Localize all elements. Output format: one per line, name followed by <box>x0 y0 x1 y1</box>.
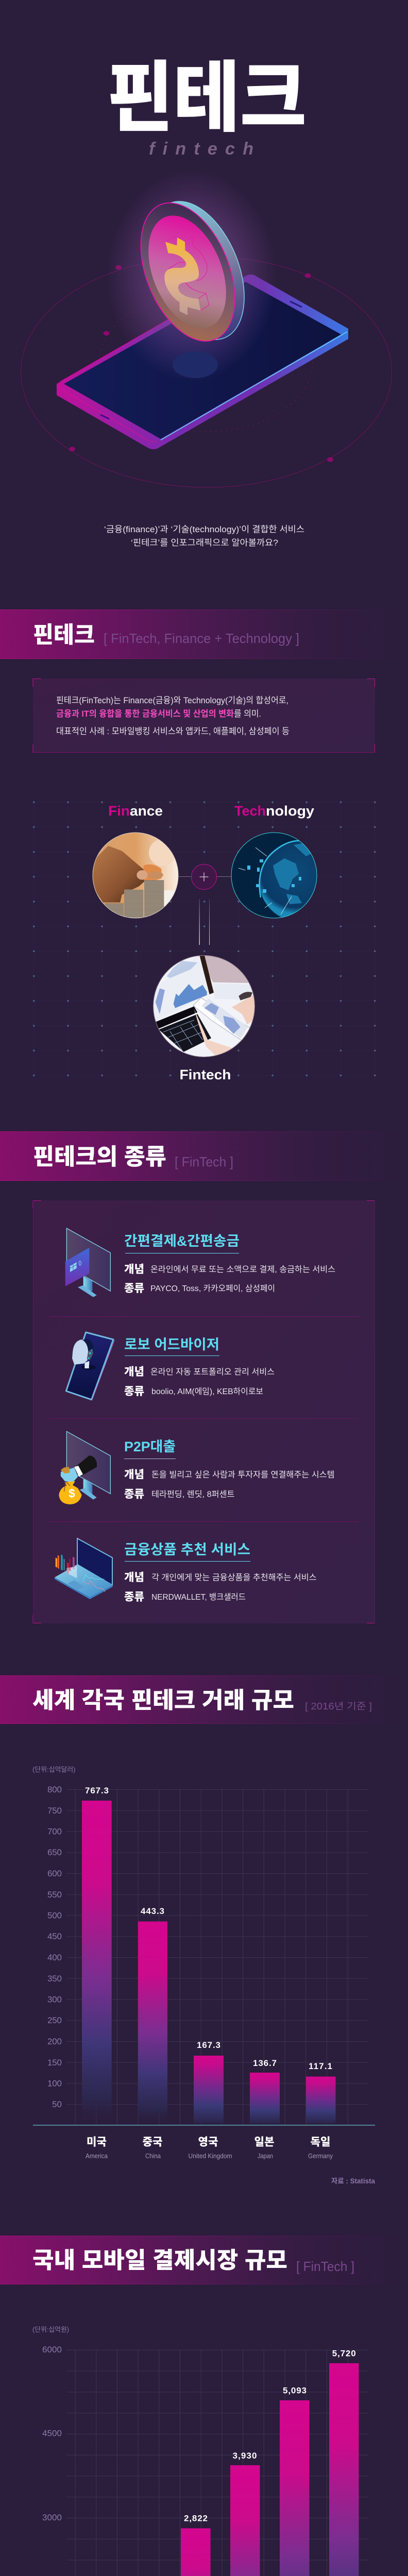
type 4: financial product recommendation: NERDWALLET, 뱅크샐러드 <box>151 1592 246 1602</box>
type 2: robo advisor: 종류 <box>124 1386 144 1397</box>
type 2: robo advisor: 개념 <box>124 1366 144 1378</box>
y axis labels <box>42 2345 62 2576</box>
type 3: P2P lending: 돈을 빌리고 싶은 사람과 투자자를 연결해주는 시스템 <box>151 1470 335 1480</box>
section header: fintech: 핀테크 <box>33 622 95 648</box>
label: Technology <box>234 803 314 819</box>
y axis labels: 800 <box>47 1785 62 1794</box>
category labels: 중국 <box>142 2136 163 2148</box>
type 3: P2P lending: 테라펀딩, 렌딧, 8퍼센트 <box>151 1490 235 1499</box>
intro text: ‘금융(finance)’과 ‘기술(technology)’이 결합한 서비스 <box>104 524 304 534</box>
orbit ring <box>21 257 392 487</box>
type 1: simple payment: 종류 <box>124 1283 144 1294</box>
y axis labels: 600 <box>47 1869 62 1878</box>
section header: fintech: [ FinTech, Finance + Technology ] <box>104 631 299 646</box>
section header: domestic mobile payment <box>0 2236 408 2284</box>
type 3: P2P lending <box>59 1431 335 1504</box>
type 4: financial product recommendation <box>55 1538 317 1603</box>
connector lines <box>178 876 231 877</box>
icon: monitor with card <box>65 1228 110 1297</box>
y axis labels: 250 <box>47 2015 62 2025</box>
bar chart: global fintech transaction volume <box>32 1766 375 2185</box>
category labels: Japan <box>258 2152 273 2160</box>
y axis labels: 50 <box>52 2099 62 2109</box>
plus icon <box>192 865 216 889</box>
category labels: America <box>86 2152 108 2160</box>
unit label: (단위:십억달러) <box>32 1766 75 1773</box>
panel: definition: 를 의미. <box>234 709 261 719</box>
category labels <box>86 2136 333 2160</box>
y axis labels: 350 <box>47 1974 62 1984</box>
y axis labels: 500 <box>47 1910 62 1921</box>
hero illustration: coin above phone <box>21 170 392 487</box>
value labels: 443.3 <box>141 1906 164 1916</box>
y axis labels: 6000 <box>42 2345 62 2354</box>
value labels: 767.3 <box>85 1786 109 1795</box>
section header: global transaction volume: 세계 각국 핀테크 거래 규모 <box>32 1688 294 1713</box>
type 1: simple payment <box>65 1228 335 1297</box>
coin <box>123 188 263 355</box>
type 3: P2P lending: 개념 <box>124 1469 144 1481</box>
category labels: China <box>145 2152 161 2160</box>
icon: robot on phone <box>66 1332 114 1400</box>
y axis labels: 100 <box>47 2078 62 2089</box>
section header: fintech types: [ FinTech ] <box>175 1154 233 1170</box>
type 1: simple payment: 간편결제&간편송금 <box>124 1233 240 1249</box>
subtitle: fintech <box>149 139 253 159</box>
type 1: simple payment: 온라인에서 무료 또는 소액으로 결제, 송금하는 서비스 <box>150 1265 335 1274</box>
value labels: 3,930 <box>233 2451 257 2461</box>
y axis labels: 150 <box>47 2058 62 2067</box>
photo: coins and hand <box>93 833 179 918</box>
y axis labels: 300 <box>47 1995 62 2004</box>
source: 자료 : Statista <box>331 2177 375 2185</box>
photo: digital globe <box>231 833 317 918</box>
label: Technology: Tech <box>234 803 266 819</box>
y axis labels: 650 <box>47 1848 62 1857</box>
value labels: 5,720 <box>332 2349 356 2359</box>
bars <box>82 2363 359 2576</box>
type 4: financial product recommendation: 개념 <box>124 1571 144 1584</box>
equals lines <box>199 899 210 945</box>
type 2: robo advisor: boolio, AIM(에임), KEB하이로보 <box>151 1387 263 1396</box>
value labels <box>86 2349 356 2576</box>
y axis labels: 400 <box>47 1953 62 1962</box>
type 4: financial product recommendation: 종류 <box>124 1591 144 1603</box>
bar chart: domestic mobile payment market <box>32 2326 375 2576</box>
section header: global transaction volume <box>0 1675 408 1724</box>
y axis labels: 200 <box>47 2037 62 2046</box>
type 2: robo advisor <box>66 1332 275 1400</box>
panel: definition: 핀테크(FinTech)는 Finance(금융)와 Technology(기술)의 합성어로, <box>56 696 288 705</box>
type 2: robo advisor: 로보 어드바이저 <box>124 1337 219 1352</box>
dotted grid background <box>31 799 378 1079</box>
intro text: ‘핀테크’를 인포그래픽으로 알아볼까요? <box>131 538 278 548</box>
section header: fintech types: 핀테크의 종류 <box>33 1144 166 1170</box>
y axis labels: 4500 <box>42 2429 62 2438</box>
section header: domestic mobile payment: 국내 모바일 결제시장 규모 <box>32 2248 287 2273</box>
section header: domestic mobile payment: [ FinTech ] <box>296 2259 354 2274</box>
diagram: finance + technology = fintech <box>93 806 317 1080</box>
label: Finance <box>108 803 163 819</box>
panel: definition: 대표적인 사례 : 모바일뱅킹 서비스와 앱카드, 애플페이, 삼성페이 등 <box>56 726 290 736</box>
value labels: 136.7 <box>253 2058 277 2068</box>
type 1: simple payment: 개념 <box>124 1263 144 1276</box>
panel: fintech types <box>33 1200 375 1623</box>
value labels: 5,093 <box>283 2386 307 2396</box>
panel: definition <box>33 679 375 753</box>
y axis labels: 3000 <box>42 2513 62 2522</box>
category labels: 미국 <box>87 2136 107 2148</box>
section header: fintech types <box>0 1131 408 1181</box>
y axis labels: 550 <box>47 1890 62 1900</box>
y axis labels <box>47 1785 62 2109</box>
type 4: financial product recommendation: 각 개인에게 맞는 금융상품을 추천해주는 서비스 <box>151 1573 317 1582</box>
unit label: (단위:십억원) <box>32 2326 69 2333</box>
section header: global transaction volume: [ 2016년 기준 ] <box>305 1701 372 1711</box>
category labels: 독일 <box>310 2136 331 2148</box>
y axis labels: 750 <box>47 1806 62 1816</box>
icon: hand with money bag: $ <box>69 1487 75 1500</box>
panel: definition: 금융과 IT의 융합을 통한 금융서비스 및 산업의 변화 <box>56 709 234 719</box>
category labels: 일본 <box>254 2136 274 2148</box>
category labels: Germany <box>308 2152 333 2160</box>
bars <box>82 1801 336 2125</box>
category labels: United Kingdom <box>189 2152 232 2160</box>
type 1: simple payment: PAYCO, Toss, 카카오페이, 삼성페이 <box>150 1284 275 1293</box>
value labels: 2,822 <box>184 2514 208 2523</box>
value labels <box>85 1786 332 2071</box>
title: 핀테크 <box>107 55 307 141</box>
value labels: 167.3 <box>197 2040 220 2050</box>
section header: fintech <box>0 609 408 659</box>
label: Finance: Fin <box>108 803 130 819</box>
coin shadow <box>173 351 218 378</box>
y axis labels: 450 <box>47 1931 62 1941</box>
type 4: financial product recommendation: 금융상품 추천 서비스 <box>124 1542 250 1557</box>
phone <box>57 275 348 449</box>
value labels: 117.1 <box>309 2061 332 2071</box>
photo: laptop and smartphone <box>152 954 258 1058</box>
type 3: P2P lending: P2P대출 <box>124 1439 176 1454</box>
intro text <box>104 524 304 548</box>
label: Finance: ance <box>130 803 163 819</box>
icon: laptop with charts <box>55 1538 113 1599</box>
y axis labels: 700 <box>47 1827 62 1836</box>
category labels: 영국 <box>198 2136 218 2148</box>
type 2: robo advisor: 온라인 자동 포트폴리오 관리 서비스 <box>150 1367 275 1377</box>
glow behind coin <box>107 170 277 381</box>
icon: hand with money bag <box>59 1431 110 1504</box>
type 3: P2P lending: 종류 <box>124 1488 144 1500</box>
label: Technology: nology <box>266 803 314 819</box>
label: Fintech: Fintech <box>179 1067 231 1082</box>
